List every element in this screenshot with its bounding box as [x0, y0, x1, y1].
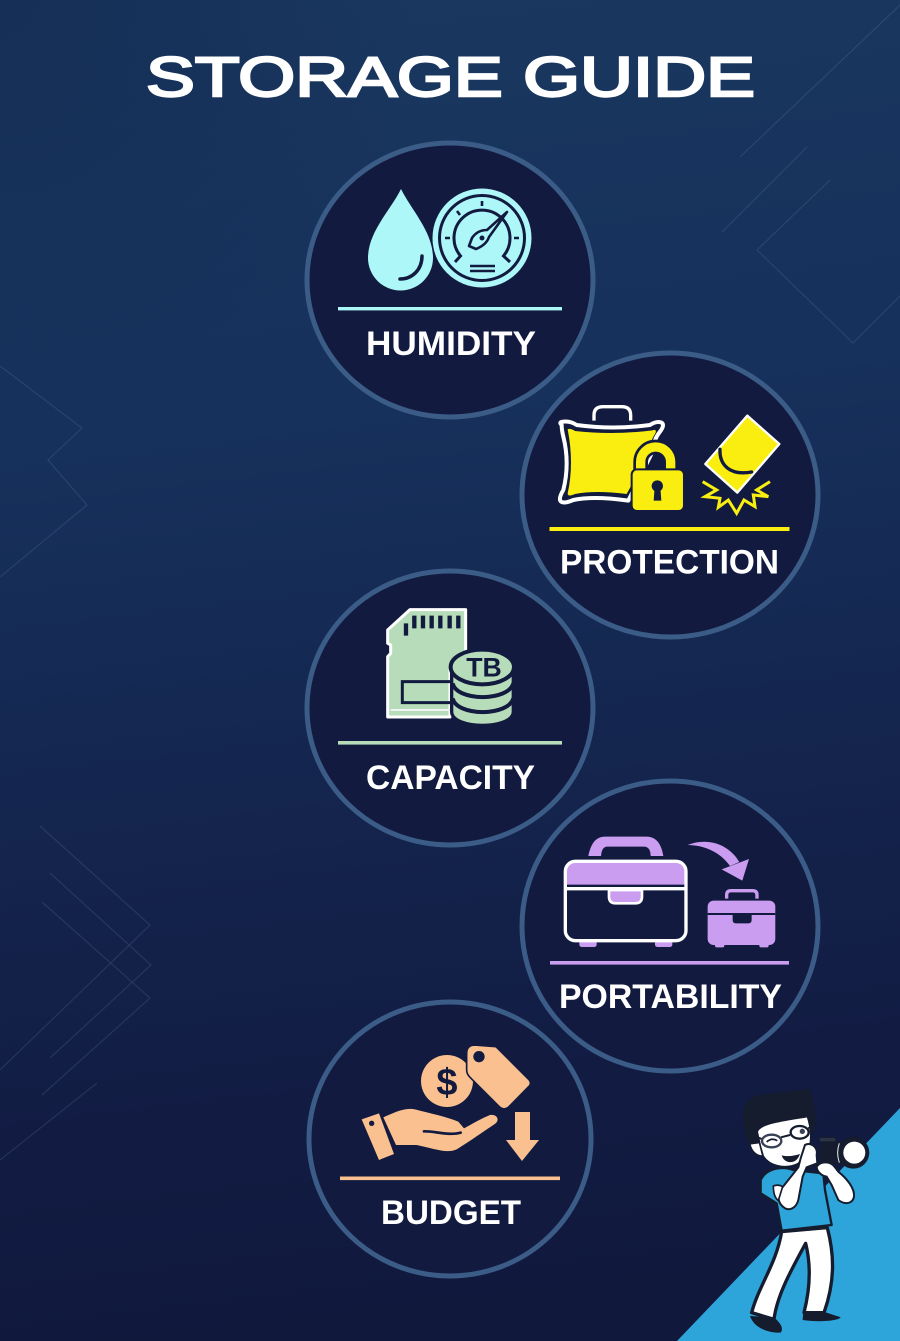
label: PROTECTION	[560, 544, 779, 582]
shirt	[761, 1168, 832, 1231]
camera	[818, 1137, 837, 1142]
label: CAPACITY	[366, 759, 535, 797]
near arm	[778, 1144, 817, 1209]
blue corner triangle	[677, 1108, 900, 1341]
hair	[743, 1088, 816, 1143]
icon: humidity gauge	[432, 188, 532, 288]
trousers	[752, 1228, 833, 1319]
title: STORAGE GUIDE	[146, 45, 755, 108]
label: HUMIDITY	[366, 325, 536, 363]
icon: down arrow	[506, 1112, 539, 1161]
face	[750, 1117, 811, 1166]
glasses	[757, 1127, 810, 1139]
icon: open hand	[362, 1109, 498, 1160]
icon: padlock	[632, 447, 684, 511]
icon: large case	[565, 837, 686, 947]
icon: TB coin stack: TB	[466, 652, 502, 682]
panel: humidity	[307, 143, 593, 417]
icon: price tag	[467, 1045, 530, 1109]
divider	[338, 741, 562, 745]
label: PORTABILITY	[559, 978, 782, 1016]
far arm	[817, 1162, 854, 1203]
icon: pillow	[560, 407, 663, 502]
divider	[338, 307, 562, 310]
photographer character	[743, 1088, 869, 1333]
divider	[550, 961, 789, 965]
divider	[550, 527, 790, 531]
icon: TB coin stack	[451, 650, 514, 725]
shoes	[750, 1312, 841, 1333]
panel: capacity	[307, 571, 593, 845]
mouth	[782, 1154, 800, 1162]
icon: water drop	[368, 189, 433, 290]
divider	[340, 1176, 560, 1180]
icon: coin: $	[436, 1062, 458, 1104]
panel: protection	[522, 353, 818, 637]
sleeve fold	[773, 1185, 783, 1201]
label: BUDGET	[381, 1194, 521, 1232]
panel: portability	[522, 781, 818, 1071]
panel: budget	[309, 1002, 591, 1276]
icon: arrow	[688, 842, 749, 881]
icon: SD card	[388, 610, 466, 717]
icon: small case	[708, 891, 775, 947]
icon: coin	[421, 1055, 473, 1107]
icon: dropped memory card	[703, 416, 779, 513]
